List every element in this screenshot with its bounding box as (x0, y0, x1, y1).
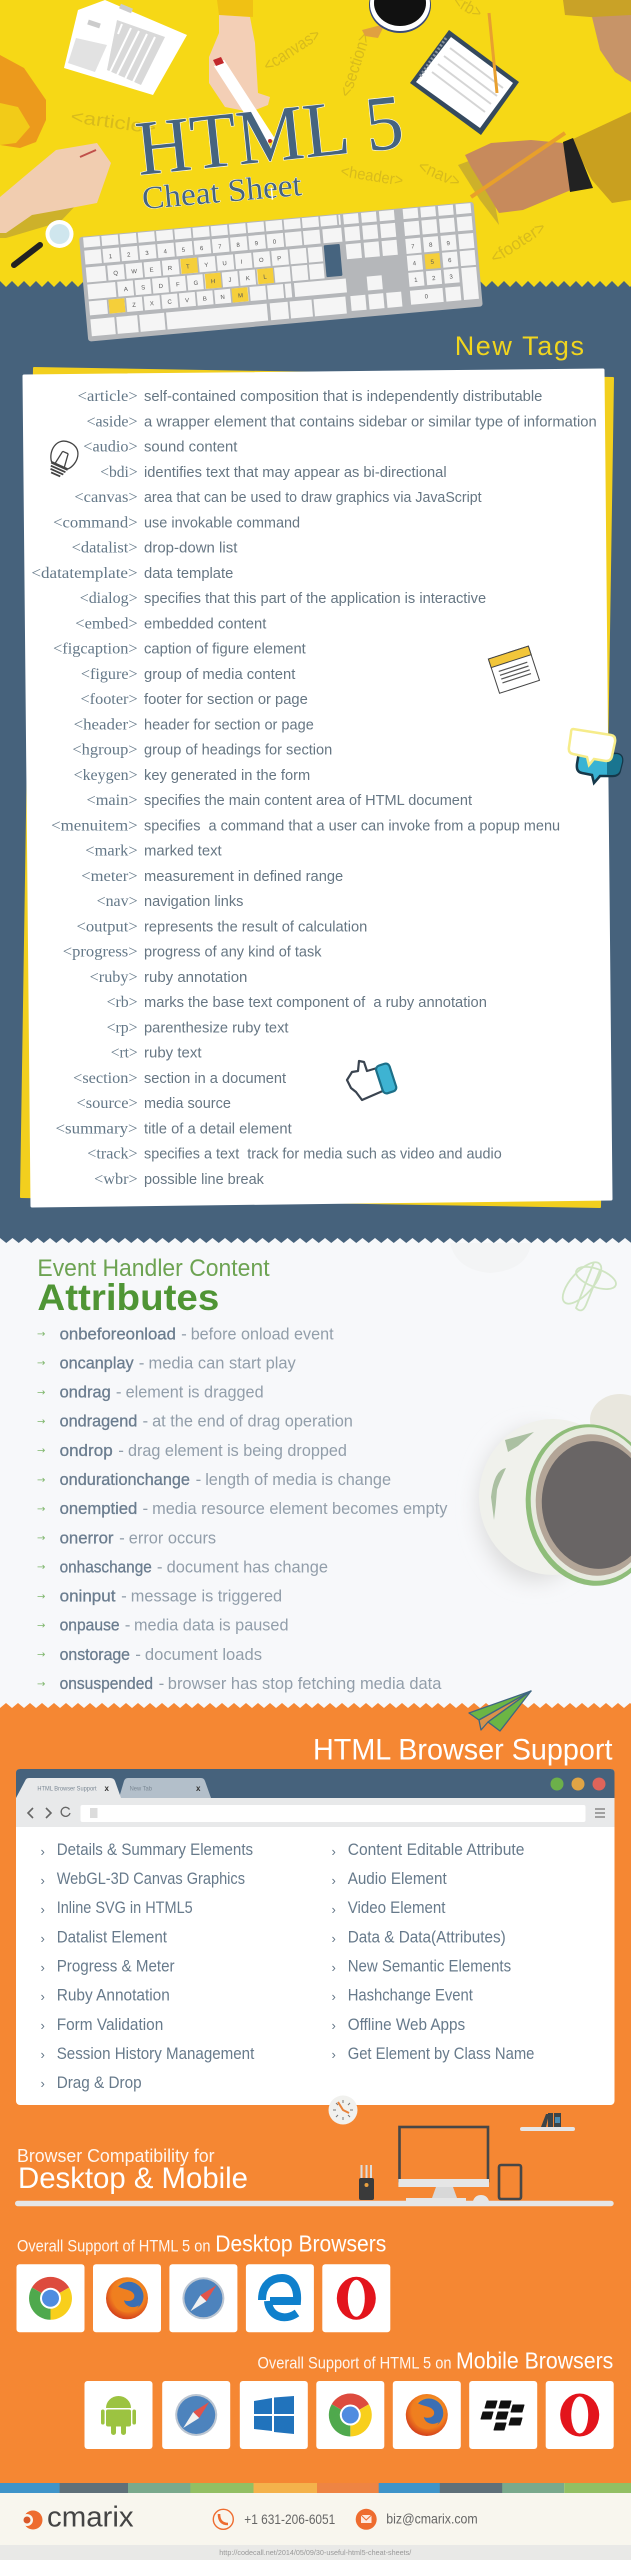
item: onbeforeonload: before onload event (191, 1324, 334, 1343)
zigzag: white to orange (0, 1703, 631, 1708)
item: onhaschange: document has change (167, 1557, 328, 1576)
item: oncanplay: → (37, 1358, 45, 1369)
row: source: <source> (76, 1095, 138, 1112)
item: oninput: - (121, 1587, 127, 1606)
item: oncanplay: oncanplay (60, 1353, 134, 1372)
row: dialog: <dialog> (80, 590, 138, 607)
row: progress (63, 944, 322, 960)
tile: Android (84, 2381, 152, 2449)
heading: mobile browser support (258, 2347, 613, 2373)
heading: mobile browser support: Overall Support of HTML 5 on (258, 2354, 452, 2372)
item: onsuspended: browser has stop fetching media data (168, 1674, 442, 1693)
tile: Safari mobile (162, 2381, 230, 2449)
faded tag words in header (69, 0, 549, 267)
item: ondrop: - (118, 1441, 124, 1460)
row: datalist (72, 540, 238, 556)
wall shelf with books (520, 2113, 575, 2131)
keyboard key labels: 789 (411, 241, 451, 250)
item: onsuspended: → (37, 1679, 45, 1690)
row: output: <output> (76, 918, 138, 935)
row: hgroup: <hgroup> (72, 742, 138, 758)
row: audio (83, 438, 238, 456)
row: dialog: specifies that this part of the application is interactive (144, 590, 486, 607)
tile: Firefox desktop (93, 2264, 161, 2332)
keyboard key labels: 123 (414, 274, 454, 284)
monitor (398, 2127, 489, 2201)
row: datalist: <datalist> (72, 540, 138, 556)
feature list right: Hashchange Event (348, 1986, 473, 2005)
feature list left: Ruby Annotation (57, 1986, 170, 2005)
magnifying glass (14, 220, 74, 265)
tile: Chrome mobile (316, 2381, 384, 2449)
icon: wall clock (328, 2096, 358, 2124)
item: onemptied: → (37, 1504, 45, 1515)
item: onpause: - (125, 1616, 130, 1635)
panel: browser window (16, 1769, 614, 2105)
feature list left: › (40, 1989, 45, 2004)
row: footer: footer for section or page (144, 691, 308, 708)
row: mark (85, 842, 223, 860)
keyboard key labels: 456 (412, 258, 452, 267)
item: onpause: → (37, 1620, 45, 1632)
keyboard key labels: QWERTYUIOP (113, 256, 282, 277)
faded tag words in header: <section> (336, 31, 374, 99)
row: main: specifies the main content area of HTML document (144, 792, 473, 809)
menu icon (595, 1809, 605, 1817)
row: article: self-contained composition that is independently distributable (144, 388, 542, 405)
inactive tab (119, 1778, 211, 1798)
item: onbeforeonload: → (37, 1329, 45, 1340)
item: ondrag: element is dragged (126, 1383, 264, 1402)
item: onstorage: document loads (145, 1645, 262, 1664)
row: bdi: identifies text that may appear as bi-directional (144, 464, 447, 481)
row: track: specifies a text track for media such as video and audio (144, 1146, 502, 1162)
item: onerror: onerror (60, 1528, 114, 1547)
row: header: <header> (74, 716, 138, 733)
item: ondrop: → (37, 1446, 45, 1457)
feature list left: › (40, 1960, 45, 1975)
white card (24, 370, 611, 1206)
row: canvas: area that can be used to draw graphics via JavaScript (144, 489, 482, 506)
row: datatemplate (31, 565, 233, 582)
row: datatemplate: data template (144, 565, 233, 582)
tablet (499, 2165, 521, 2199)
feature list left: › (40, 1931, 45, 1946)
item: ondurationchange: ondurationchange (60, 1470, 190, 1489)
keyboard key labels (109, 224, 455, 328)
item: onsuspended: - (159, 1674, 164, 1693)
item: ondurationchange: → (37, 1475, 45, 1486)
browser title bar (16, 1769, 614, 1798)
keyboard main key rows (84, 220, 349, 336)
row: rt (111, 1044, 202, 1062)
address bar (80, 1805, 586, 1822)
row: rb: <rb> (107, 994, 138, 1011)
heading: desktop browser support (17, 2231, 386, 2257)
source bar (0, 2545, 631, 2560)
tile: Windows (240, 2381, 308, 2449)
item: ondurationchange (37, 1470, 391, 1489)
item: ondragend: → (37, 1416, 45, 1428)
faded tag words in header: <footer> (487, 218, 549, 267)
row: ruby (90, 969, 247, 986)
keyboard key labels: ASDFGHJKL (124, 274, 268, 293)
item: oninput: → (37, 1591, 45, 1602)
item: onpause: media data is paused (134, 1616, 288, 1635)
item: onhaschange: - (157, 1557, 163, 1576)
item: oncanplay (37, 1353, 296, 1372)
faded tag words in header: <article> (69, 106, 157, 138)
tile: Opera mobile (546, 2381, 614, 2449)
row: menuitem: <menuitem> (51, 817, 138, 834)
row: main: <main> (86, 792, 138, 809)
feature list right: › (332, 1931, 336, 1946)
feature list right: › (332, 2047, 336, 2062)
feature list right: › (332, 1989, 336, 2004)
desk surface (15, 2201, 614, 2206)
heading: Event Handler Content: Event Handler Content (37, 1255, 270, 1282)
row: keygen: key generated in the form (144, 767, 310, 784)
feature list left (40, 1840, 255, 2092)
keyboard highlighted keys (105, 236, 442, 314)
icon: paper clips (556, 1256, 619, 1310)
inactive tab: x (196, 1784, 201, 1793)
zigzag: blue to white (0, 1238, 631, 1243)
row: menuitem: specifies a command that a user can invoke from a popup menu (144, 817, 560, 834)
row: mark: marked text (144, 842, 223, 860)
background: blue section (0, 286, 631, 1238)
feature list left: › (40, 2018, 45, 2033)
row: command: <command> (53, 514, 138, 531)
item: ondrop (37, 1441, 347, 1460)
item: ondragend (37, 1412, 353, 1431)
row: meter: measurement in defined range (144, 868, 343, 885)
source url: http://codecall.net/2014/05/09/30-useful-html5-cheat-sheets/ (219, 2548, 412, 2557)
row: nav: <nav> (97, 893, 138, 910)
feature list right: Offline Web Apps (348, 2015, 465, 2034)
item: ondrop: drag element is being dropped (128, 1441, 347, 1460)
item: onstorage: → (37, 1650, 45, 1661)
keyboard key labels: 0 (424, 294, 429, 300)
row: progress: <progress> (63, 944, 138, 960)
row: bdi: <bdi> (100, 464, 138, 481)
row: figure: <figure> (81, 666, 138, 683)
window control dots (550, 1778, 606, 1790)
item: oninput (37, 1587, 282, 1606)
keyboard (76, 170, 483, 342)
row: wbr: possible line break (144, 1171, 264, 1188)
tag list (31, 388, 597, 1188)
item: onerror (37, 1528, 216, 1547)
feature list right: › (332, 1873, 336, 1888)
icon: light bulb (44, 437, 82, 480)
row: hgroup: group of headings for section (144, 742, 332, 758)
pencil holder (359, 2165, 374, 2200)
row: embed: <embed> (75, 615, 138, 632)
row: canvas: <canvas> (74, 489, 138, 506)
row: source: media source (144, 1095, 231, 1112)
row: datalist: drop-down list (144, 540, 238, 556)
item: ondragend: - (142, 1412, 148, 1431)
feature list right: › (332, 1844, 336, 1859)
row: progress: progress of any kind of task (144, 944, 322, 960)
heading: desktop browser support: Desktop Browsers (215, 2231, 386, 2257)
keyboard enter key (324, 244, 342, 277)
footer colour stripes (0, 2483, 631, 2493)
feature list left: WebGL-3D Canvas Graphics (57, 1869, 245, 1888)
item: ondragend: at the end of drag operation (152, 1412, 353, 1431)
keyboard navigation keys (343, 210, 402, 311)
feature list right: › (332, 2018, 336, 2033)
page background: yellow header (0, 0, 631, 282)
faded tag words in header: <nav> (415, 156, 463, 192)
top centre hand with marker (209, 0, 272, 143)
item: oninput: oninput (60, 1587, 116, 1606)
feature list right: Video Element (348, 1898, 446, 1917)
row: command: use invokable command (144, 514, 300, 531)
faint cup on table (450, 1243, 531, 1273)
item: onpause: onpause (60, 1616, 120, 1635)
row: output: represents the result of calculation (144, 918, 367, 935)
heading: HTML Browser Support: HTML Browser Support (313, 1733, 613, 1766)
item: onemptied: - (142, 1499, 148, 1518)
footer background (0, 2493, 631, 2545)
item: oncanplay: - (139, 1353, 144, 1372)
row: ruby: ruby annotation (144, 969, 247, 986)
item: onhaschange: onhaschange (60, 1557, 152, 1576)
feature list right (332, 1840, 534, 2063)
row: figcaption (53, 640, 307, 658)
feature list left: Form Validation (57, 2015, 163, 2034)
coffee cup top (362, 0, 431, 38)
row: aside: a wrapper element that contains sidebar or similar type of information (144, 413, 597, 430)
row: track: <track> (87, 1146, 138, 1162)
faded tag words in header: <header> (339, 163, 404, 190)
item: onstorage (37, 1645, 262, 1664)
item: ondrop: ondrop (60, 1441, 113, 1460)
inactive tab: New Tab (130, 1786, 152, 1792)
background: white attributes section (0, 1238, 631, 1708)
row: meter: <meter> (81, 868, 138, 885)
row: summary: <summary> (56, 1120, 138, 1137)
contact: email (356, 2509, 478, 2530)
zigzag: yellow to blue (0, 281, 631, 287)
row: section: section in a document (144, 1070, 287, 1087)
row: section (73, 1070, 287, 1087)
item: oncanplay: media can start play (148, 1353, 296, 1372)
left orange sleeve (0, 55, 46, 148)
row: figcaption: caption of figure element (144, 640, 307, 658)
row: audio: <audio> (83, 438, 138, 456)
heading: desktop browser support: Overall Support of HTML 5 on (17, 2238, 210, 2256)
feature list left: › (40, 2047, 45, 2062)
active tab (16, 1778, 121, 1798)
item: ondrag: - (116, 1383, 122, 1402)
right hand with pencil (458, 112, 631, 225)
title: HTML 5: HTML 5 (132, 77, 407, 192)
item: ondragend: ondragend (60, 1412, 137, 1431)
row: summary (56, 1120, 293, 1137)
row: ruby: <ruby> (90, 969, 138, 986)
item: onstorage: - (135, 1645, 141, 1664)
feature list right: New Semantic Elements (348, 1956, 511, 1976)
row: rb: marks the base text component of a ruby annotation (144, 994, 487, 1011)
notepad and pencil (410, 13, 519, 135)
feature list left: Datalist Element (57, 1927, 167, 1946)
feature list left: › (40, 1902, 45, 1917)
item: ondrag (37, 1383, 264, 1402)
item: onerror: error occurs (129, 1528, 216, 1547)
feature list left: Details & Summary Elements (57, 1840, 253, 1859)
row: mark: <mark> (85, 842, 138, 860)
row: rp: parenthesize ruby text (144, 1019, 289, 1036)
row: audio: sound content (144, 438, 238, 456)
icon: paper plane (469, 1691, 531, 1731)
row: datatemplate: <datatemplate> (31, 565, 138, 582)
item: onsuspended: onsuspended (60, 1674, 153, 1693)
photo: coffee mug (479, 1394, 631, 1594)
keyboard numeric keypad (403, 203, 479, 305)
row: aside: <aside> (86, 413, 138, 430)
row: source (76, 1095, 231, 1112)
item: onemptied: media resource element becomes empty (152, 1499, 448, 1518)
icon: chat bubbles (569, 729, 622, 783)
feature list right: Audio Element (348, 1869, 447, 1888)
feature list left: › (40, 2076, 45, 2091)
feature list left: Inline SVG in HTML5 (57, 1898, 193, 1917)
tile: Safari desktop (169, 2264, 237, 2332)
contact: email: biz@cmarix.com (386, 2510, 478, 2526)
item: onerror: - (119, 1528, 125, 1547)
faded tag words in header: <canvas> (260, 25, 324, 75)
feature list right: › (332, 1902, 336, 1917)
row: figure: group of media content (144, 666, 296, 683)
icon: note window (488, 646, 539, 693)
row: wbr: <wbr> (94, 1171, 138, 1188)
feature list right: Content Editable Attribute (348, 1840, 524, 1859)
item: ondrag: → (37, 1387, 45, 1398)
row: header (74, 716, 314, 733)
tile: Firefox mobile (393, 2381, 461, 2449)
tile: Opera desktop (322, 2264, 390, 2332)
heading: New Tags: New Tags (455, 331, 584, 361)
mouse (473, 2195, 489, 2201)
item: ondrag: ondrag (60, 1383, 111, 1402)
background: orange section (0, 1708, 631, 2483)
row: keygen: <keygen> (74, 767, 138, 784)
row: embed: embedded content (144, 615, 267, 632)
heading: Attributes: Attributes (37, 1277, 219, 1318)
top right sleeve (563, 0, 631, 82)
page icon (90, 1808, 98, 1818)
heading: Desktop & Mobile: Desktop & Mobile (18, 2162, 248, 2195)
feature list left: Progress & Meter (57, 1956, 175, 1976)
row: wbr (94, 1171, 264, 1188)
item: onbeforeonload (37, 1324, 334, 1343)
list: event handlers (37, 1324, 448, 1693)
item: onsuspended (37, 1674, 442, 1693)
row: summary: title of a detail element (144, 1120, 293, 1137)
item: onerror: → (37, 1533, 45, 1544)
lower-left hand (0, 143, 111, 238)
row: nav: navigation links (144, 893, 243, 910)
row: header: header for section or page (144, 716, 314, 733)
tile: Edge desktop (246, 2264, 314, 2332)
row: footer: <footer> (80, 691, 138, 708)
row: embed (75, 615, 267, 632)
item: oninput: message is triggered (131, 1587, 282, 1606)
tile: Chrome desktop (16, 2264, 84, 2332)
active tab: x (104, 1784, 110, 1793)
row: keygen (74, 767, 310, 784)
item: ondurationchange: length of media is change (205, 1470, 391, 1489)
item: onpause (37, 1616, 288, 1635)
item: onstorage: onstorage (60, 1645, 130, 1664)
item: onbeforeonload: onbeforeonload (60, 1324, 176, 1343)
feature list right: › (332, 1960, 336, 1975)
subtitle: Cheat Sheet: Cheat Sheet (140, 166, 303, 216)
browser toolbar (16, 1798, 614, 1827)
row: section: <section> (73, 1070, 138, 1087)
contact: phone: +1 631-206-6051 (244, 2511, 335, 2527)
item: onhaschange (37, 1557, 328, 1576)
feature list left: Session History Management (57, 2044, 255, 2063)
heading: mobile browser support: Mobile Browsers (456, 2347, 613, 2373)
keyboard key labels: ZXCVBNM (132, 293, 243, 309)
feature list left: Drag & Drop (57, 2073, 142, 2092)
icon: thumbs up (347, 1061, 397, 1100)
row: article: <article> (78, 388, 138, 405)
item: ondurationchange: - (196, 1470, 201, 1489)
tile: BlackBerry (469, 2381, 537, 2449)
feature list right: Data & Data(Attributes) (348, 1927, 506, 1946)
item: onhaschange: → (37, 1562, 45, 1573)
row: rt: <rt> (111, 1044, 138, 1062)
logo: cmarix: cmarix (47, 2502, 134, 2534)
item: onbeforeonload: - (181, 1324, 187, 1343)
row: nav (97, 893, 243, 910)
navigation buttons (28, 1807, 70, 1818)
row: rp: <rp> (107, 1019, 138, 1036)
item: onemptied: onemptied (60, 1499, 137, 1518)
feature list left: › (40, 1844, 45, 1859)
contact: phone (213, 2509, 335, 2529)
row: rt: ruby text (144, 1044, 202, 1062)
heading: Browser Compatibility for: Browser Compatibility for (17, 2145, 214, 2166)
feature list right: Get Element by Class Name (348, 2044, 534, 2063)
active tab: HTML Browser Support (37, 1786, 97, 1792)
yellow paper behind card (21, 368, 613, 1207)
keyboard key labels: 1234567890 (109, 239, 277, 260)
row: figcaption: <figcaption> (53, 640, 138, 658)
papers on desk (64, 0, 187, 95)
row: command (53, 514, 300, 531)
feature list left: › (40, 1873, 45, 1888)
illustration: desk with devices (15, 2113, 614, 2206)
